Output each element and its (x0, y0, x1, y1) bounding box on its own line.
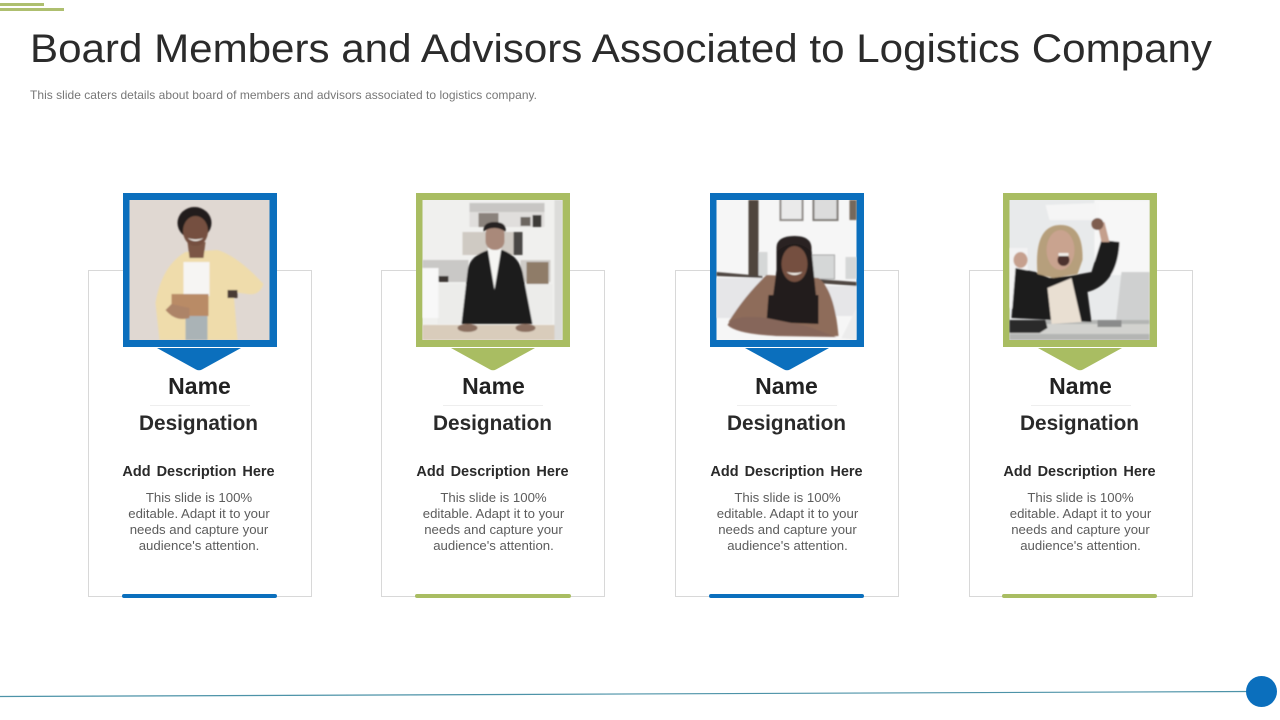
name 3: Name (755, 373, 818, 399)
panel: member card 1 (88, 193, 312, 598)
description text 3: needs and capture your (718, 522, 857, 537)
name 2: Name (462, 373, 525, 399)
description text 4: audience's attention. (1020, 538, 1141, 553)
photo 3 in blue frame (710, 193, 864, 347)
card 2 outline (381, 270, 605, 597)
card 1 outline (88, 270, 312, 597)
bottom bar 4 (1002, 594, 1157, 598)
designation 4: Designation (1020, 412, 1139, 435)
arrow 2 (451, 348, 535, 370)
description text 2 (423, 490, 564, 553)
description heading 2: Add Description Here (416, 464, 569, 480)
panel: member card 4 (969, 193, 1193, 598)
footer timeline line with blue dot (0, 676, 1277, 707)
description text 3 (717, 490, 858, 553)
arrow 3 (745, 348, 829, 370)
description text 4: needs and capture your (1011, 522, 1150, 537)
panel: member card 3 (675, 193, 899, 598)
description text 3: editable. Adapt it to your (717, 506, 858, 521)
bottom bar 2 (415, 594, 571, 598)
description text 2: This slide is 100% (440, 490, 547, 505)
decorative top accent bars (0, 3, 64, 11)
description text 1: audience's attention. (139, 538, 259, 553)
description text 4 (1010, 490, 1152, 553)
description heading 3: Add Description Here (710, 464, 863, 480)
panel: member card 2 (381, 193, 605, 598)
bottom bar 1 (122, 594, 277, 598)
description text 2: audience's attention. (433, 538, 554, 553)
description text 1 (128, 490, 270, 553)
card 4 outline (969, 270, 1193, 597)
description text 2: editable. Adapt it to your (423, 506, 564, 521)
description text 1: editable. Adapt it to your (128, 506, 270, 521)
description text 1: This slide is 100% (146, 490, 252, 505)
description text 2: needs and capture your (424, 522, 563, 537)
subtitle: This slide caters details about board of members and advisors associated to logistics company. (30, 88, 537, 102)
description text 4: This slide is 100% (1027, 490, 1134, 505)
title: Board Members and Advisors Associated to Logistics Company (30, 27, 1212, 71)
designation 1: Designation (139, 412, 258, 435)
description text 4: editable. Adapt it to your (1010, 506, 1151, 521)
designation 2: Designation (433, 412, 552, 435)
description text 3: audience's attention. (727, 538, 848, 553)
photo 2 in green frame (416, 193, 570, 347)
photo 1 in blue frame (123, 193, 277, 347)
designation 3: Designation (727, 412, 846, 435)
photo 4 in green frame (1003, 193, 1157, 347)
description heading 4: Add Description Here (1003, 464, 1156, 480)
description heading 1: Add Description Here (122, 464, 275, 480)
arrow 1 (157, 348, 241, 370)
name 1: Name (168, 373, 231, 399)
name 4: Name (1049, 373, 1112, 399)
description text 3: This slide is 100% (734, 490, 841, 505)
bottom bar 3 (709, 594, 864, 598)
card 3 outline (675, 270, 899, 597)
arrow 4 (1038, 348, 1122, 370)
description text 1: needs and capture your (130, 522, 268, 537)
